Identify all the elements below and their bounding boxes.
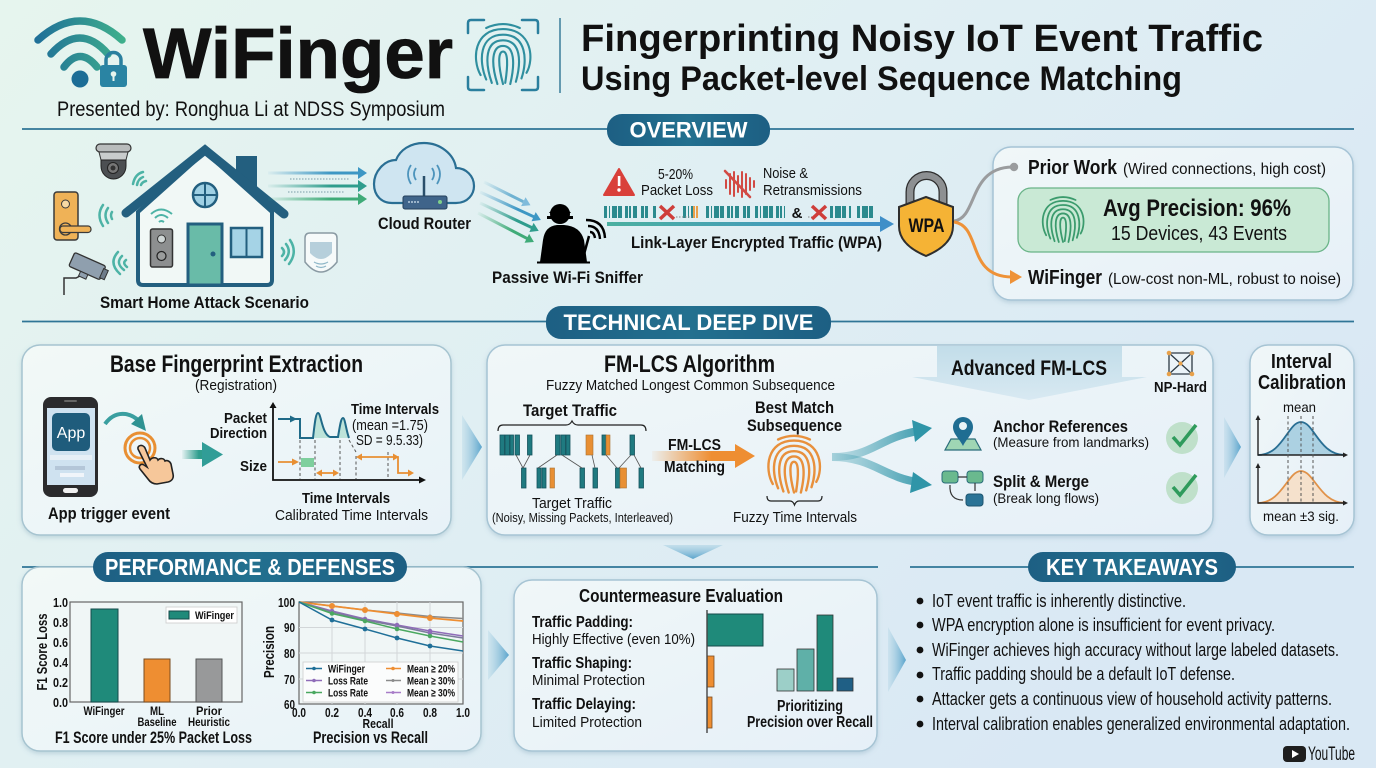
bar chart: protection level: [707, 610, 763, 733]
label: prioritizing: [747, 698, 873, 731]
legend: Mean ≥ 20%: [407, 664, 455, 676]
heading: overview: [607, 114, 770, 146]
title: WiFinger: [143, 15, 453, 94]
heading: Countermeasure Evaluation: [579, 586, 783, 606]
bar chart: F1 score: [34, 595, 252, 747]
arrow: section down: [663, 545, 723, 559]
axis labels: 0.0: [53, 695, 68, 710]
text: delaying: Traffic Delaying:: [532, 696, 636, 713]
arrow: FM-LCS matching: [652, 437, 755, 476]
label: traffic: Link-Layer Encrypted Traffic (WPA): [631, 233, 882, 252]
arrow: to countermeasures: [488, 630, 509, 680]
icon: dome camera: [96, 144, 131, 179]
axis labels: 80: [284, 646, 295, 661]
legend: Loss Rate: [328, 688, 368, 700]
chart title: F1 Score under 25% Packet Loss: [55, 729, 252, 747]
callout: average precision: 15 Devices, 43 Events: [1111, 223, 1287, 245]
text: delaying: Limited Protection: [532, 714, 642, 731]
bar: ML baseline: [144, 659, 170, 702]
axis labels: 0.4: [53, 655, 69, 670]
banner: advanced FM-LCS: Advanced FM-LCS: [951, 357, 1107, 380]
axis labels: 0.6: [53, 635, 68, 650]
arrow: FM-LCS matching: FM-LCS: [668, 437, 721, 454]
panel: prior work comparison: [954, 147, 1353, 300]
heading: Fuzzy Matched Longest Common Subsequence: [546, 377, 835, 394]
heading: performance and defenses: PERFORMANCE & DEFENSES: [105, 554, 395, 580]
subtitle: [581, 18, 1263, 98]
text: wifinger: WiFinger: [1028, 267, 1102, 289]
icon: cloud router: [374, 143, 474, 209]
best match subsequence: Subsequence: [747, 416, 842, 435]
text: wifinger: (Low-cost non-ML, robust to noise): [1108, 271, 1341, 288]
axis labels: 90: [284, 620, 295, 635]
item: anchor references: Anchor References: [993, 417, 1128, 436]
callout: average precision: Avg Precision: 96%: [1103, 195, 1291, 222]
chart labels: Packet: [224, 410, 267, 427]
icon: phone with app: [43, 397, 98, 497]
series: [299, 602, 463, 651]
arrow: to key takeaways: [888, 627, 906, 692]
label: app trigger: App trigger event: [48, 504, 170, 523]
text: padding: Traffic Padding:: [532, 614, 633, 631]
logo: YouTube: [1283, 744, 1355, 765]
heading: Interval: [1271, 351, 1332, 373]
axis labels: Recall: [362, 717, 394, 731]
heading: [1258, 351, 1346, 415]
packet sequence: [604, 205, 876, 222]
packet sequence: &: [792, 205, 803, 222]
axis labels: WiFinger: [84, 704, 125, 718]
heading: key takeaways: KEY TAKEAWAYS: [1046, 554, 1218, 580]
best match subsequence: Best Match: [755, 398, 834, 417]
arrows: home to cloud: [268, 167, 367, 205]
heading: [546, 351, 835, 394]
axis labels: Prior: [196, 704, 222, 718]
axis labels: 0.8: [53, 615, 68, 630]
legend: Mean ≥ 30%: [407, 688, 455, 700]
axis labels: 0.8: [423, 705, 437, 720]
text: prior work: (Wired connections, high cost): [1123, 161, 1326, 178]
axis labels: 0.4: [358, 705, 373, 720]
axis labels: ML: [150, 704, 164, 718]
arrow: to FM-LCS: [462, 415, 482, 480]
axis labels: [34, 595, 230, 729]
axis labels: Precision: [261, 626, 278, 678]
connector: prior work: [954, 163, 1018, 221]
icon: security camera: [64, 252, 110, 295]
icon: house: [126, 150, 284, 285]
banner: advanced FM-LCS: [912, 346, 1147, 400]
text: shaping: [532, 655, 645, 689]
heading: Calibration: [1258, 372, 1346, 394]
callout: noise and retransmissions: Retransmissions: [763, 182, 862, 199]
heading: Base Fingerprint Extraction: [110, 351, 363, 378]
target traffic diagram: (Noisy, Missing Packets, Interleaved): [492, 511, 673, 525]
item: split and merge: (Break long flows): [993, 490, 1099, 506]
text: prior work: [1028, 157, 1326, 179]
axis labels: 0.0: [292, 705, 306, 720]
arrow: fork to advanced methods: [832, 420, 932, 493]
callout: average precision: [1018, 188, 1329, 252]
target traffic diagram: Target Traffic: [523, 401, 617, 420]
panel: performance and defenses charts: [22, 567, 481, 751]
item: split and merge: [942, 471, 1198, 506]
callout: noise and retransmissions: [725, 165, 862, 199]
text: prior work: Prior Work: [1028, 157, 1118, 179]
bar: WiFinger: [91, 609, 118, 702]
axis labels: 1.0: [456, 705, 470, 720]
icon: wifi with padlock: [38, 21, 127, 88]
arrow: FM-LCS matching: Matching: [664, 459, 725, 476]
icon: motion sensor: [305, 233, 337, 272]
chart: packet direction and size: [270, 402, 426, 484]
axis labels: F1 Score Loss: [34, 614, 51, 690]
chart labels: SD = 9.5.33): [356, 432, 423, 449]
legend: Loss Rate: [328, 676, 368, 688]
label: mean ±3 sig.: [1263, 508, 1339, 524]
connector: wifinger: [954, 222, 1022, 284]
axis labels: Heuristic: [188, 715, 230, 729]
heading: (Registration): [195, 377, 277, 394]
axis labels: [261, 595, 470, 731]
icon: phone with app: App: [57, 425, 85, 442]
divider: [559, 18, 561, 93]
encrypted traffic stream: [604, 205, 894, 252]
label: prioritizing: Prioritizing: [777, 698, 843, 715]
icon: smart door lock: [54, 192, 91, 240]
chart title: Precision vs Recall: [313, 729, 428, 747]
panel: smart home attack scenario: [54, 144, 337, 312]
arrow: traffic: [607, 216, 894, 232]
arrows: cloud to sniffer: [476, 178, 543, 246]
heading: [110, 351, 363, 394]
panel: FM-LCS algorithm: [487, 345, 1213, 535]
axis labels: Baseline: [138, 715, 177, 729]
line chart: precision vs recall: [261, 595, 470, 747]
item: anchor references: (Measure from landmarks): [993, 434, 1149, 450]
heading: FM-LCS Algorithm: [604, 351, 775, 378]
header: [38, 15, 1263, 121]
heading: mean: [1283, 399, 1316, 415]
icon: NP-hard graph: NP-Hard: [1154, 380, 1207, 396]
icon: NP-hard graph: [1154, 351, 1207, 396]
icon: curved arrow: [105, 414, 146, 431]
icon: wireless signal arcs: [100, 172, 294, 274]
target traffic diagram: [492, 401, 673, 525]
axis labels: 0.6: [390, 705, 404, 720]
chart labels: (mean =1.75): [352, 417, 428, 434]
heading: technical deep dive: [546, 306, 831, 339]
label: prioritizing: Precision over Recall: [747, 714, 873, 731]
list: key takeaways: Traffic padding should be a default IoT defense.: [932, 664, 1235, 684]
bar chart: precision over recall: [777, 615, 853, 691]
axis labels: 0.2: [325, 705, 339, 720]
label: sniffer: Passive Wi-Fi Sniffer: [492, 268, 643, 287]
arrow: to interval calibration: [1224, 417, 1241, 478]
axis labels: 100: [278, 595, 295, 610]
legend: [303, 662, 458, 702]
chart labels: Size: [240, 458, 267, 475]
icon: WPA shield lock: [899, 176, 953, 256]
axis labels: 1.0: [53, 595, 68, 610]
chart labels: Direction: [210, 425, 267, 442]
legend: WiFinger: [195, 610, 235, 622]
chart labels: Time Intervals: [351, 401, 439, 418]
text: padding: Highly Effective (even 10%): [532, 631, 695, 648]
list: key takeaways: IoT event traffic is inherently distinctive.: [932, 591, 1186, 611]
heading: technical deep dive: TECHNICAL DEEP DIVE: [564, 310, 814, 335]
icon: WPA shield lock: WPA: [908, 215, 944, 237]
panel: countermeasure evaluation: [514, 580, 877, 751]
text: shaping: Traffic Shaping:: [532, 655, 632, 672]
legend: [166, 607, 237, 623]
chart: measured distribution: [1256, 415, 1348, 458]
text: delaying: [532, 696, 642, 731]
list: key takeaways: [917, 591, 1350, 734]
chart labels: [210, 401, 439, 524]
chart: calibrated distribution: [1256, 416, 1348, 506]
callout: noise and retransmissions: Noise &: [763, 165, 808, 182]
text: padding: [532, 614, 695, 648]
icon: fingerprint scanner: [468, 20, 538, 90]
axis labels: 60: [284, 697, 295, 712]
callout: packet loss: Packet Loss: [641, 182, 713, 199]
item: anchor references: [945, 417, 1198, 454]
bar: prior heuristic: [196, 659, 222, 702]
label: attack scenario: Smart Home Attack Scenario: [100, 293, 309, 312]
callout: packet loss: [604, 166, 713, 199]
label: cloud router: Cloud Router: [378, 214, 471, 233]
arrow: to chart: [182, 442, 223, 467]
target traffic diagram: Target Traffic: [532, 495, 612, 512]
panel: base fingerprint extraction: [22, 345, 451, 535]
presenter line: Presented by: Ronghua Li at NDSS Symposium: [57, 98, 445, 121]
heading: overview: OVERVIEW: [630, 118, 748, 142]
text: wifinger: [1028, 267, 1341, 289]
legend: WiFinger: [328, 664, 366, 676]
text: shaping: Minimal Protection: [532, 672, 645, 689]
subtitle: Fingerprinting Noisy IoT Event Traffic: [581, 18, 1263, 60]
axis labels: 0.2: [53, 675, 68, 690]
item: split and merge: Split & Merge: [993, 472, 1089, 491]
best match subsequence: Fuzzy Time Intervals: [733, 509, 857, 526]
axis labels: 70: [284, 672, 295, 687]
panel: interval calibration: [1250, 345, 1354, 535]
subtitle: Using Packet-level Sequence Matching: [581, 60, 1182, 98]
chart labels: Calibrated Time Intervals: [275, 507, 428, 524]
icon: passive sniffer silhouette: [537, 204, 605, 262]
icon: tap gesture: [125, 433, 173, 484]
callout: packet loss: 5-20%: [658, 166, 693, 183]
list: key takeaways: WPA encryption alone is insufficient for event privacy.: [932, 615, 1275, 635]
legend: Mean ≥ 30%: [407, 676, 455, 688]
chart labels: Time Intervals: [302, 490, 390, 507]
best match subsequence: [733, 398, 857, 526]
